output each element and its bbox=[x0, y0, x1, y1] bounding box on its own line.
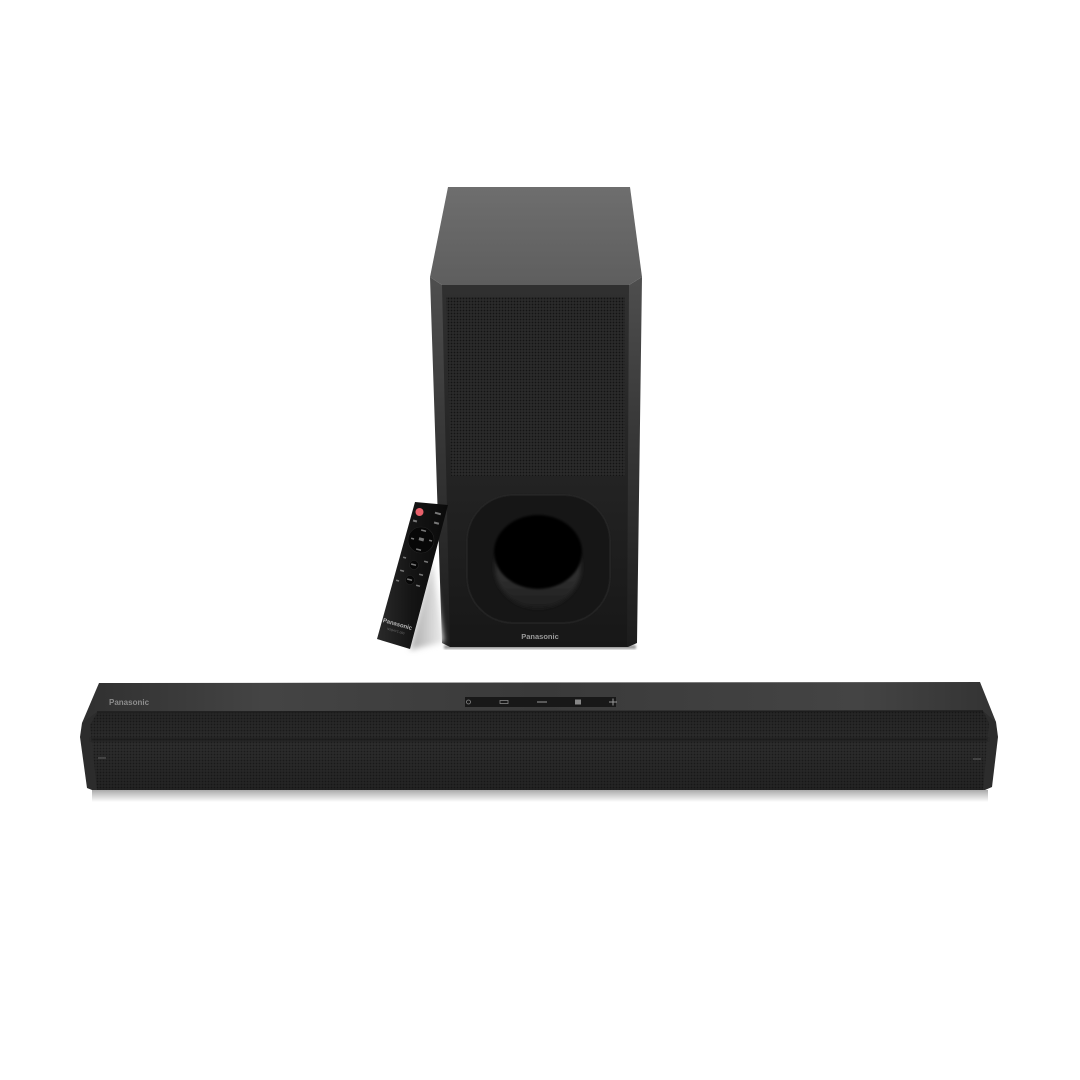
volume minus icon bbox=[537, 702, 547, 703]
power button bbox=[416, 508, 424, 516]
soundbar front grille bbox=[90, 711, 989, 790]
subwoofer logo: Panasonic bbox=[521, 632, 559, 641]
remote buttons bbox=[396, 508, 441, 587]
subwoofer bbox=[430, 187, 642, 649]
source icon bbox=[500, 700, 508, 704]
navigation ring bbox=[408, 527, 434, 553]
play pause icon bbox=[575, 700, 581, 704]
touch control panel bbox=[465, 697, 617, 707]
remote control bbox=[377, 502, 448, 650]
input button bbox=[410, 560, 418, 570]
power icon bbox=[466, 700, 470, 704]
subwoofer floor shadow bbox=[444, 645, 636, 649]
grille crease bbox=[91, 738, 988, 741]
volume plus icon bbox=[609, 698, 617, 706]
front edge line bbox=[97, 711, 983, 712]
woofer surround bbox=[467, 495, 610, 623]
subwoofer front face bbox=[442, 285, 629, 647]
soundbar top face bbox=[82, 682, 996, 723]
subwoofer side frame bbox=[430, 277, 642, 647]
soundbar body bbox=[80, 711, 998, 790]
woofer lip bbox=[495, 526, 581, 608]
play button bbox=[406, 576, 414, 584]
remote model number: N2QAYC 000 bbox=[387, 627, 405, 635]
subwoofer grille bbox=[446, 297, 625, 476]
remote body bbox=[377, 502, 448, 649]
soundbar reflection bbox=[92, 790, 988, 802]
right status light bbox=[973, 758, 981, 760]
left status light bbox=[98, 757, 106, 759]
subwoofer top face bbox=[430, 187, 642, 285]
soundbar logo: Panasonic bbox=[109, 698, 150, 707]
panel background bbox=[465, 697, 616, 707]
soundbar bbox=[80, 682, 998, 790]
remote shadow bbox=[410, 560, 444, 650]
remote logo: Panasonic bbox=[382, 618, 413, 632]
grille shading bbox=[90, 711, 989, 790]
woofer port opening bbox=[494, 515, 582, 589]
